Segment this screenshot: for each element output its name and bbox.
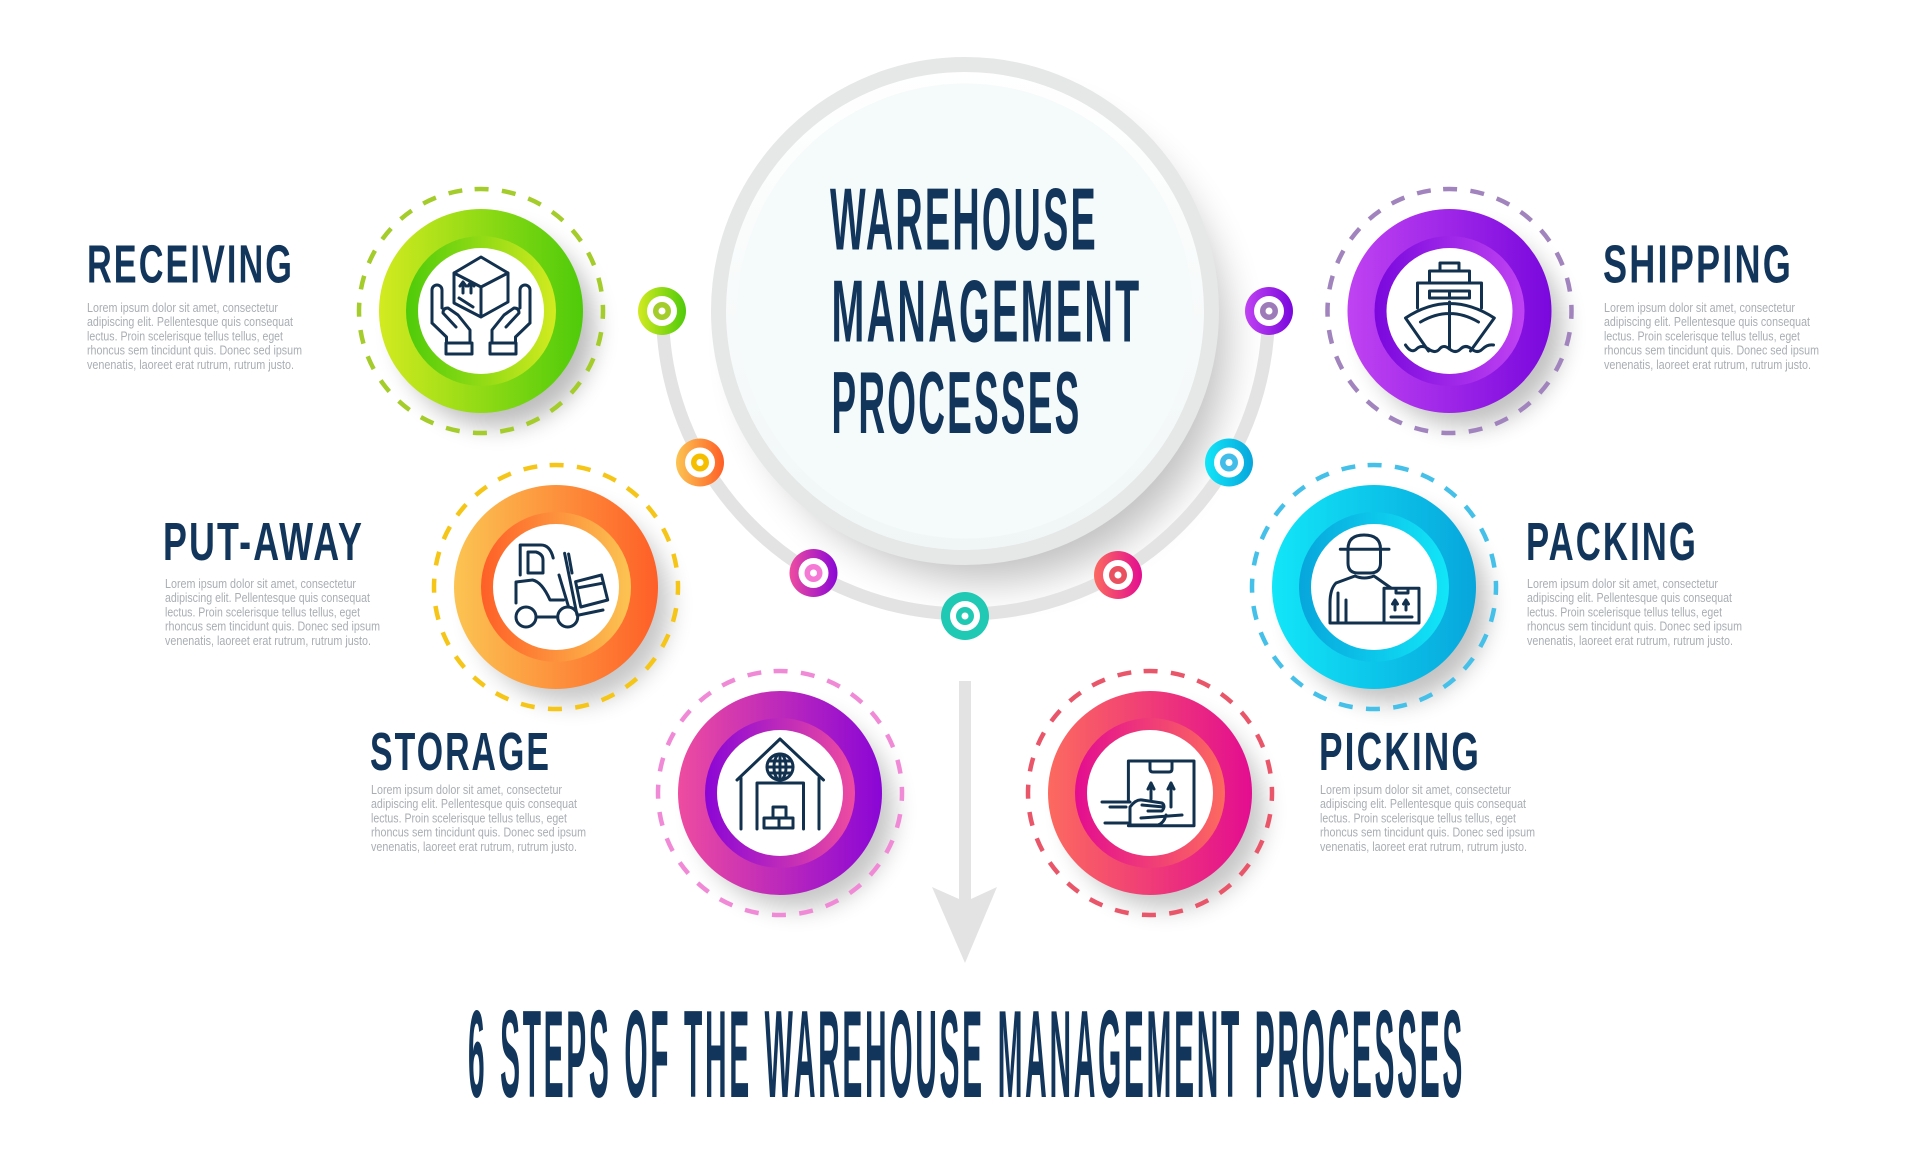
text block: storage: rhoncus sem tincidunt quis. Donec sed ipsum xyxy=(371,826,586,840)
text block: picking: Lorem ipsum dolor sit amet, consectetur xyxy=(1320,783,1511,797)
timeline dot: packing xyxy=(1205,438,1253,486)
text block: picking: adipiscing elit. Pellentesque quis consequat xyxy=(1320,797,1526,811)
text block: picking: PICKING xyxy=(1319,722,1481,782)
text block: shipping: venenatis, laoreet erat rutrum, rutrum justo. xyxy=(1604,358,1811,372)
text block: shipping: rhoncus sem tincidunt quis. Donec sed ipsum xyxy=(1604,344,1819,358)
panel: central circle: MANAGEMENT xyxy=(832,262,1142,360)
text block: put-away: rhoncus sem tincidunt quis. Donec sed ipsum xyxy=(165,620,380,634)
text block: storage: STORAGE xyxy=(370,722,551,782)
text block: storage: venenatis, laoreet erat rutrum, rutrum justo. xyxy=(371,840,577,854)
text block: picking xyxy=(1319,722,1535,854)
text block: packing: lectus. Proin scelerisque tellus tellus, eget xyxy=(1527,605,1722,619)
icon: cargo ship xyxy=(1406,263,1494,352)
text block: shipping: adipiscing elit. Pellentesque quis consequat xyxy=(1604,315,1810,329)
text block: receiving: RECEIVING xyxy=(87,234,294,294)
text block: packing: PACKING xyxy=(1526,512,1698,572)
timeline dot: put-away xyxy=(676,438,724,486)
panel: central circle xyxy=(718,64,1212,558)
text block: packing: Lorem ipsum dolor sit amet, consectetur xyxy=(1527,577,1718,591)
timeline dot: receiving xyxy=(638,287,686,335)
timeline arc xyxy=(662,311,1268,614)
text block: put-away: lectus. Proin scelerisque tellus tellus, eget xyxy=(165,605,360,619)
step circle: picking xyxy=(1022,665,1278,921)
timeline dot: centre teal xyxy=(941,592,989,640)
text block: storage: lectus. Proin scelerisque tellus tellus, eget xyxy=(371,811,567,825)
text block: shipping: lectus. Proin scelerisque tellus tellus, eget xyxy=(1604,329,1800,343)
text block: picking: venenatis, laoreet erat rutrum, rutrum justo. xyxy=(1320,840,1527,854)
arrow: down to footer title xyxy=(932,681,997,963)
icon: hands holding box xyxy=(432,257,530,354)
text block: put-away: adipiscing elit. Pellentesque quis consequat xyxy=(165,591,370,605)
text block: receiving: rhoncus sem tincidunt quis. Donec sed ipsum xyxy=(87,344,302,358)
text block: packing: venenatis, laoreet erat rutrum, rutrum justo. xyxy=(1527,634,1733,648)
central heading xyxy=(830,170,1142,452)
step circle: receiving xyxy=(353,183,609,439)
text block: receiving: venenatis, laoreet erat rutrum, rutrum justo. xyxy=(87,358,294,372)
text block: picking: lectus. Proin scelerisque tellus tellus, eget xyxy=(1320,811,1516,825)
timeline dot: shipping xyxy=(1245,287,1293,335)
panel: central circle shadow xyxy=(747,102,1227,582)
text block: packing xyxy=(1526,512,1742,648)
timeline dot: picking xyxy=(1094,551,1142,599)
text block: receiving xyxy=(87,234,302,372)
text block: shipping: Lorem ipsum dolor sit amet, consectetur xyxy=(1604,301,1795,315)
step circle: storage xyxy=(652,665,908,921)
icon: hand lifting box xyxy=(1102,761,1194,826)
text block: receiving: Lorem ipsum dolor sit amet, consectetur xyxy=(87,301,278,315)
text block: shipping: SHIPPING xyxy=(1603,234,1793,294)
text block: put-away xyxy=(163,512,380,648)
text block: packing: adipiscing elit. Pellentesque quis consequat xyxy=(1527,591,1732,605)
step circle: put-away xyxy=(428,459,684,715)
text block: put-away: Lorem ipsum dolor sit amet, consectetur xyxy=(165,577,356,591)
text block: storage xyxy=(370,722,586,854)
step circle: packing xyxy=(1246,459,1502,715)
icon: forklift xyxy=(516,545,608,627)
text block: put-away: venenatis, laoreet erat rutrum, rutrum justo. xyxy=(165,634,371,648)
panel: central circle: WAREHOUSE xyxy=(830,170,1098,268)
text block: picking: rhoncus sem tincidunt quis. Donec sed ipsum xyxy=(1320,826,1535,840)
timeline dot: storage xyxy=(790,549,838,597)
central heading: PROCESSES xyxy=(832,353,1082,452)
text block: shipping xyxy=(1603,234,1819,372)
text block: packing: rhoncus sem tincidunt quis. Donec sed ipsum xyxy=(1527,620,1742,634)
icon: delivery worker with box xyxy=(1330,535,1419,623)
step circle: shipping xyxy=(1321,183,1578,439)
icon: warehouse with globe xyxy=(737,739,824,829)
text block: receiving: lectus. Proin scelerisque tellus tellus, eget xyxy=(87,329,283,343)
text block: storage: Lorem ipsum dolor sit amet, consectetur xyxy=(371,783,562,797)
text block: put-away: PUT-AWAY xyxy=(163,512,364,572)
text block: storage: adipiscing elit. Pellentesque quis consequat xyxy=(371,797,577,811)
text block: receiving: adipiscing elit. Pellentesque quis consequat xyxy=(87,315,293,329)
